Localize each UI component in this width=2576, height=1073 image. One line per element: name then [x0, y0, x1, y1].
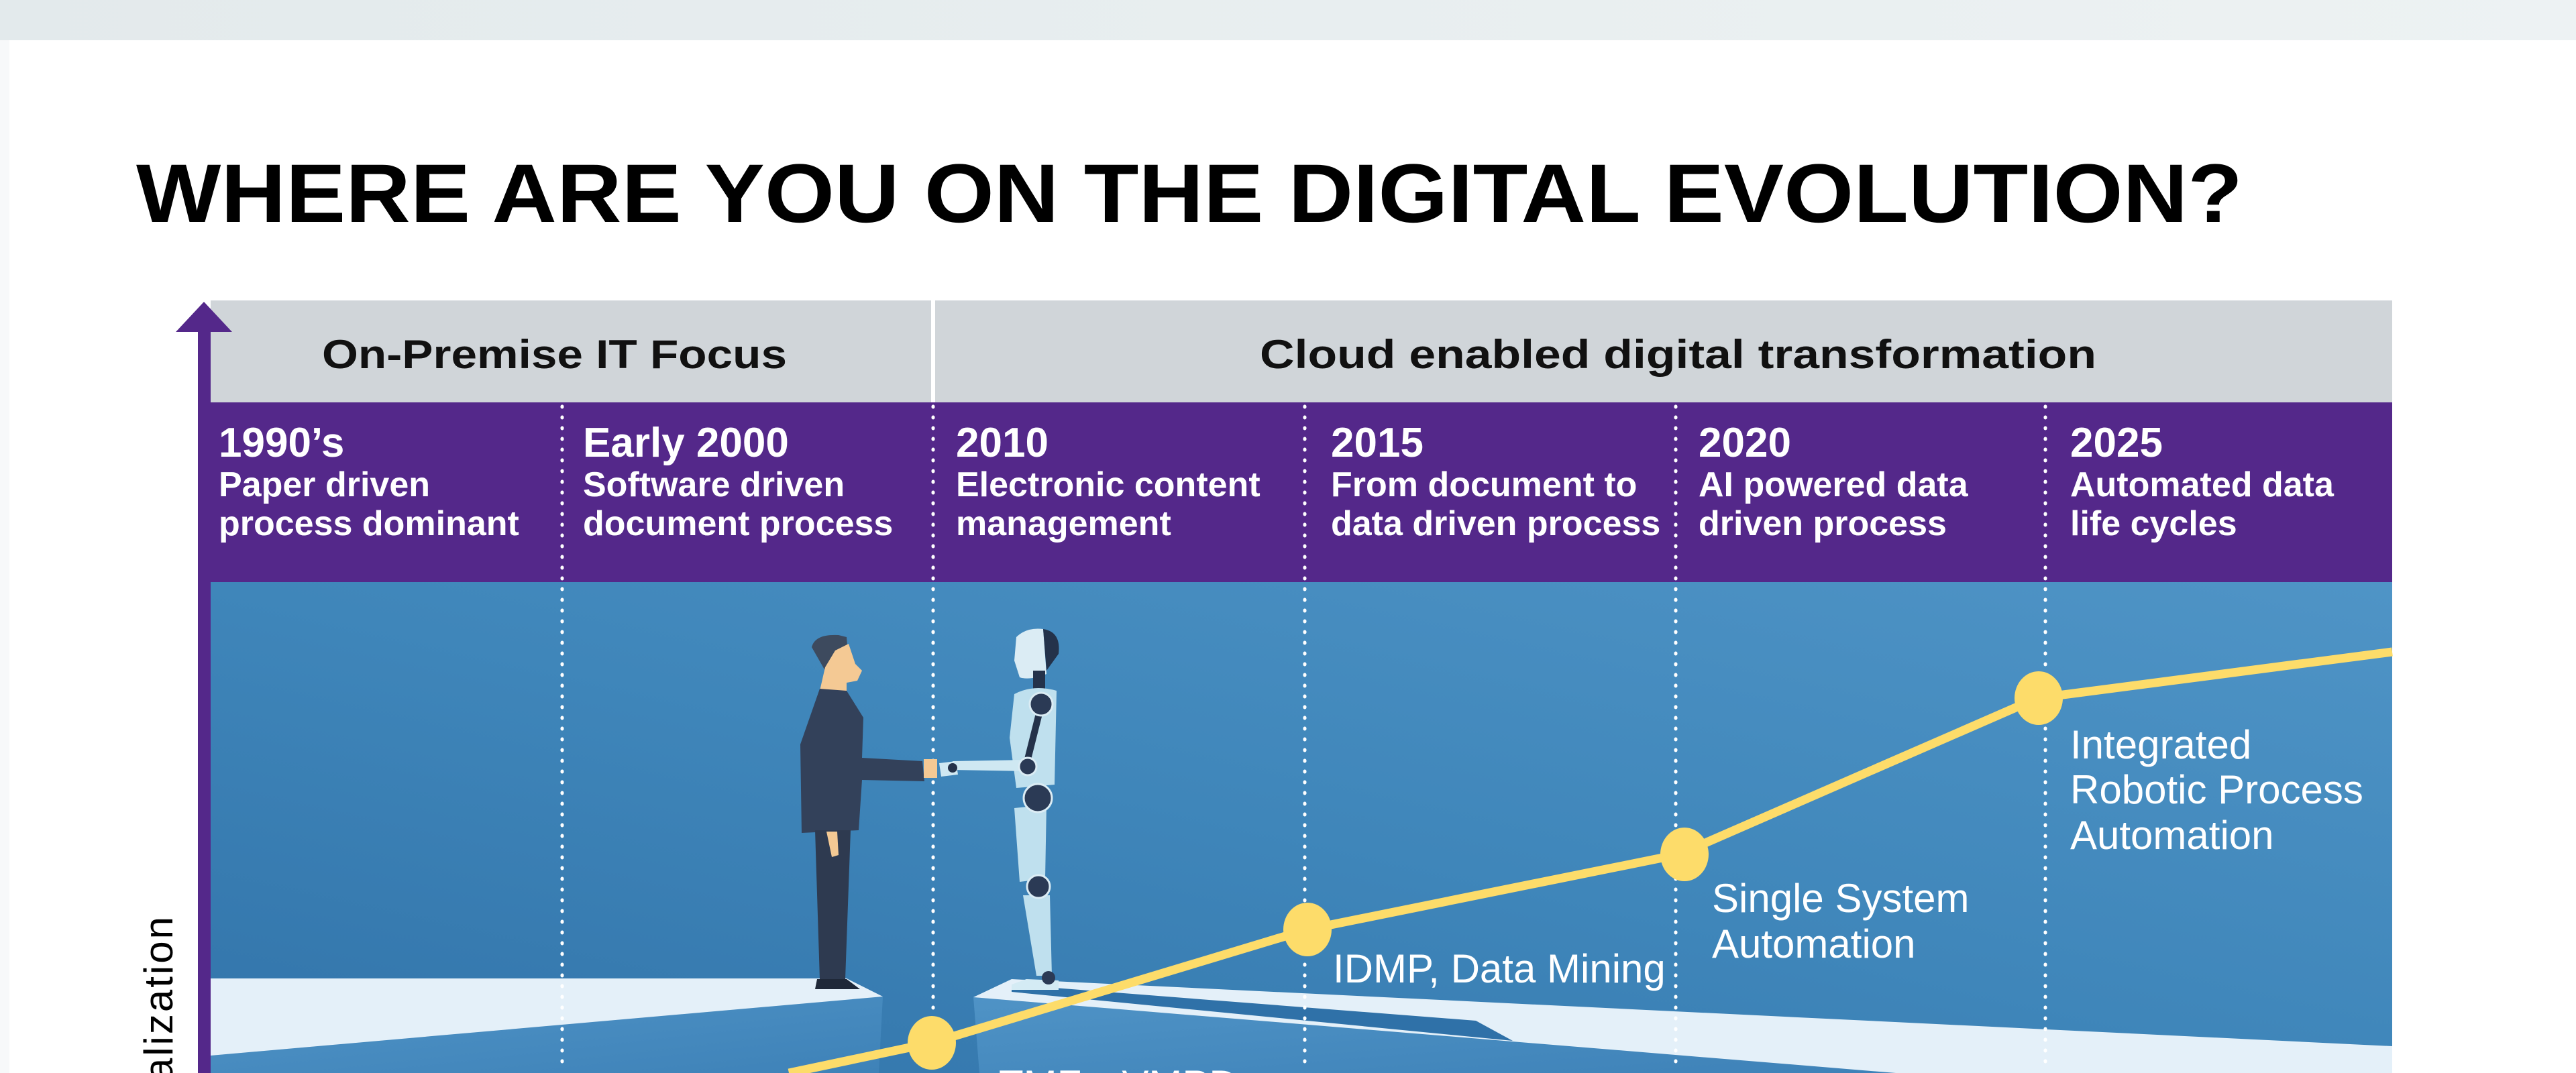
- period 2020: [1699, 420, 1969, 543]
- period 2020: driven process: [1699, 504, 1947, 543]
- platforms: [211, 978, 2392, 1073]
- period early 2000: document process: [583, 504, 893, 543]
- period early 2000: [583, 420, 893, 543]
- period 1990s: [219, 420, 519, 543]
- period 1990s: Paper driven: [219, 465, 430, 504]
- illustration: robot: [939, 629, 1059, 990]
- heading: on-premise: On-Premise IT Focus: [322, 332, 787, 377]
- period 2010: Electronic content: [956, 465, 1260, 504]
- period 1990s: 1990’s: [219, 420, 344, 466]
- period 2020: 2020: [1699, 420, 1791, 466]
- header: era bands: [211, 300, 2392, 402]
- chart area: [211, 582, 2392, 1073]
- period 2025: [2070, 420, 2334, 543]
- axis arrow: [176, 302, 232, 1073]
- period 2025: life cycles: [2070, 504, 2237, 543]
- period 2010: management: [956, 504, 1171, 543]
- top bar: [0, 0, 2576, 40]
- milestone labels: Integrated: [2070, 722, 2251, 767]
- heading: cloud: Cloud enabled digital transformation: [1260, 332, 2096, 377]
- milestone labels: Robotic Process: [2070, 767, 2363, 812]
- period 2015: 2015: [1331, 420, 1424, 466]
- milestone labels: [1333, 722, 2363, 991]
- period 2025: Automated data: [2070, 465, 2334, 504]
- period 2010: 2010: [956, 420, 1049, 466]
- yellow progress line: [789, 652, 2392, 1073]
- purple timeline band: [211, 402, 2392, 582]
- dotted dividers: [562, 406, 2045, 1072]
- milestone labels: Automation: [2070, 813, 2274, 858]
- period early 2000: Early 2000: [583, 420, 789, 466]
- period 2015: From document to: [1331, 465, 1637, 504]
- period 2015: data driven process: [1331, 504, 1660, 543]
- period early 2000: Software driven: [583, 465, 845, 504]
- period 1990s: process dominant: [219, 504, 519, 543]
- title: WHERE ARE YOU ON THE DIGITAL EVOLUTION?: [136, 148, 2243, 240]
- period 2010: [956, 420, 1260, 543]
- milestone labels: Single System: [1712, 876, 1970, 921]
- milestone labels: Automation: [1712, 921, 1916, 966]
- period 2025: 2025: [2070, 420, 2163, 466]
- milestone labels: IDMP, Data Mining: [1333, 946, 1666, 991]
- period 2015: [1331, 420, 1660, 543]
- illustration: businessman: [800, 635, 937, 989]
- period 2020: AI powered data: [1699, 465, 1969, 504]
